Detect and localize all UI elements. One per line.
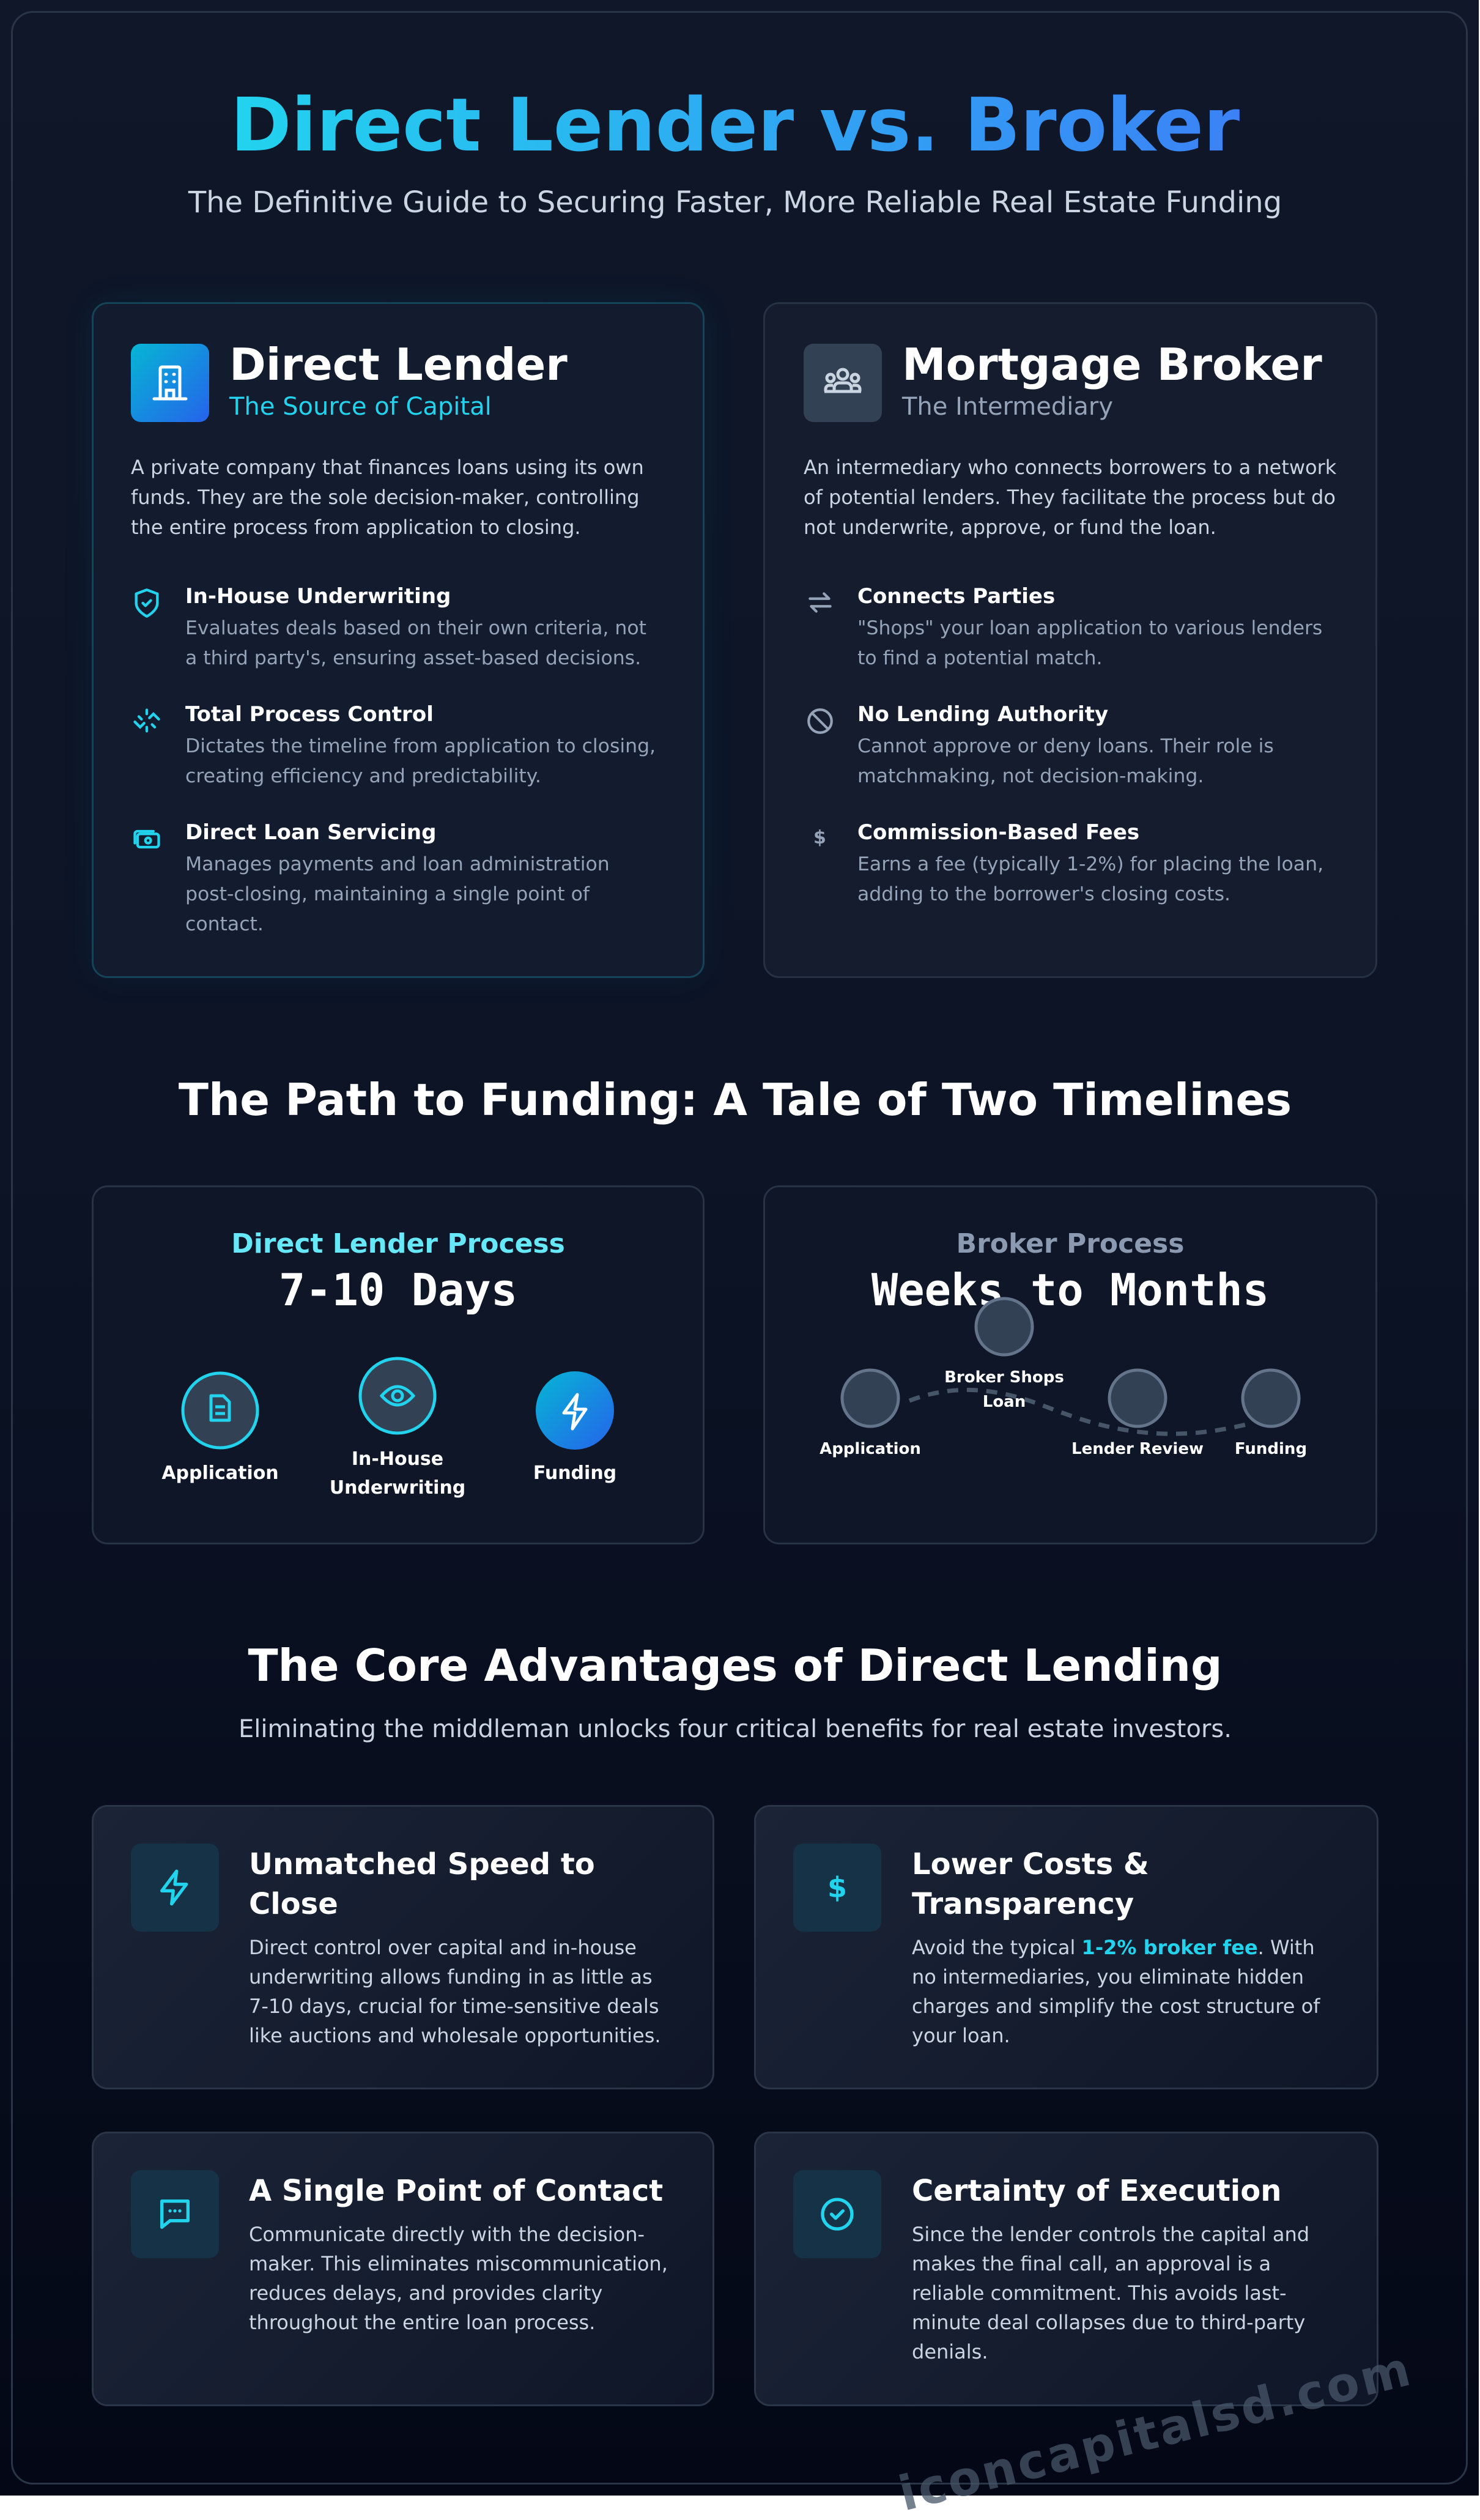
text: direct lender description: [131, 456, 644, 539]
feature: no lending authority: matchmaking, not decision-making.: [857, 765, 1204, 787]
feature: connects parties: to find a potential match.: [857, 647, 1103, 669]
step: application: Application: [820, 1440, 921, 1458]
text: certainty: makes the final call, an approval is a: [912, 2252, 1271, 2275]
feature: no lending authority: No Lending Authority: [857, 702, 1108, 727]
heading: core advantages: The Core Advantages of Direct Lending: [248, 1640, 1223, 1691]
feature: direct loan servicing: Manages payments and loan administration: [185, 853, 610, 875]
panel: lower costs: [754, 1805, 1378, 2089]
step: application: Application: [161, 1462, 279, 1484]
icon: check circle: [793, 2170, 881, 2258]
text: certainty: [912, 2223, 1309, 2363]
feature: direct loan servicing: post-closing, maintaining a single point of: [185, 883, 590, 905]
feature: in-house underwriting: [185, 584, 646, 669]
step: broker shops loan: Loan: [983, 1393, 1026, 1411]
feature: total process control: [185, 702, 656, 787]
feature: connects parties: Connects Parties: [857, 584, 1055, 609]
text: lower costs: Avoid the typical 1-2% broker fee. With: [912, 1936, 1315, 1959]
subheading: source of capital: The Source of Capital: [229, 393, 492, 421]
feature: in-house underwriting: In-House Underwriting: [185, 584, 451, 609]
subheading: intermediary: The Intermediary: [902, 393, 1113, 421]
icon: servicing: [133, 829, 160, 849]
connector: dashed path: [909, 1390, 1251, 1434]
heading: broker process: Broker Process: [956, 1228, 1184, 1259]
feature: commission fees: Earns a fee (typically 1-2%) for placing the loan,: [857, 853, 1323, 875]
text: single point: maker. This eliminates miscommunication,: [249, 2252, 668, 2275]
chart: broker steps: [820, 1297, 1307, 1458]
step: underwriting: In-House: [352, 1448, 443, 1470]
feature: total process control: Dictates the timeline from application to closing,: [185, 735, 656, 757]
title: speed: [249, 1847, 595, 1921]
text: broker description: [804, 456, 1337, 539]
number: 7-10 days: 7-10 Days: [279, 1264, 517, 1316]
panel: mortgage broker: [763, 302, 1377, 978]
text: single point: reduces delays, and provides clarity: [249, 2281, 602, 2305]
icon: shield: [135, 588, 159, 618]
title: Direct Lender vs. Broker: [231, 83, 1240, 168]
icon: dollar: [793, 1844, 881, 1932]
title: lower costs: [912, 1847, 1149, 1921]
text: speed: 7-10 days, crucial for time-sensitive deals: [249, 1995, 659, 2018]
text: certainty: denials.: [912, 2340, 988, 2363]
feature: total process control: Total Process Control: [185, 702, 434, 727]
heading: direct lender: Direct Lender: [229, 339, 568, 390]
icon: chat: [131, 2170, 219, 2258]
icon: lightning: [131, 1844, 219, 1932]
feature: in-house underwriting: a third party's, ensuring asset-based decisions.: [185, 647, 641, 669]
text: lower costs: no intermediaries, you eliminate hidden: [912, 1965, 1304, 1988]
title: lower costs: Transparency: [912, 1887, 1134, 1921]
icon: people: [804, 344, 882, 422]
text: advantages subtitle: Eliminating the middleman unlocks four critical benefits for real estate investors.: [239, 1715, 1232, 1743]
feature: direct loan servicing: contact.: [185, 913, 264, 935]
chart: direct lender steps: [161, 1357, 616, 1499]
subtitle: The Definitive Guide to Securing Faster, More Reliable Real Estate Funding: [188, 185, 1282, 220]
title: speed: Unmatched Speed to: [249, 1847, 595, 1881]
panel: speed: [92, 1805, 714, 2089]
feature: direct loan servicing: Direct Loan Servicing: [185, 820, 436, 845]
feature: no lending authority: Cannot approve or deny loans. Their role is: [857, 735, 1274, 757]
text: broker description: An intermediary who connects borrowers to a network: [804, 456, 1336, 479]
step: funding: Funding: [1235, 1440, 1307, 1458]
heading: mortgage broker: Mortgage Broker: [902, 339, 1322, 390]
title: lower costs: Lower Costs &: [912, 1847, 1149, 1881]
step: funding: Funding: [533, 1462, 616, 1484]
step: broker shops loan: Broker Shops: [944, 1368, 1064, 1387]
icon: building: [131, 344, 209, 422]
text: single point: Communicate directly with the decision-: [249, 2223, 645, 2246]
icon: ban: [807, 708, 833, 734]
heading: direct lender process: Direct Lender Process: [231, 1228, 565, 1259]
step: broker shops loan: [944, 1299, 1064, 1411]
text: broker description: not underwrite, approve, or fund the loan.: [804, 516, 1216, 539]
icon: arrows: [808, 592, 832, 613]
icon: process control: [133, 708, 160, 733]
title: certainty: Certainty of Execution: [912, 2174, 1281, 2208]
step: funding: [1235, 1370, 1307, 1458]
feature: direct loan servicing: [185, 820, 610, 935]
panel: certainty: [754, 2132, 1378, 2406]
feature: commission fees: [857, 820, 1323, 905]
feature: in-house underwriting: Evaluates deals based on their own criteria, not: [185, 617, 646, 639]
step: lender review: Lender Review: [1071, 1440, 1204, 1458]
text: lower costs: your loan.: [912, 2024, 1010, 2047]
feature: commission fees: adding to the borrower's closing costs.: [857, 883, 1230, 905]
text: speed: underwriting allows funding in as little as: [249, 1965, 653, 1988]
text: broker description: of potential lenders. They facilitate the process but do: [804, 486, 1336, 509]
text: certainty: reliable commitment. This avoids last-: [912, 2281, 1287, 2305]
text: direct lender description: the entire process from application to closing.: [131, 516, 581, 539]
feature: connects parties: "Shops" your loan application to various lenders: [857, 617, 1322, 639]
title: single point: A Single Point of Contact: [249, 2174, 663, 2208]
step: lender review: [1071, 1370, 1204, 1458]
feature: connects parties: [857, 584, 1322, 669]
text: direct lender description: A private company that finances loans using its own: [131, 456, 644, 479]
text: certainty: Since the lender controls the capital and: [912, 2223, 1309, 2246]
step: underwriting: Underwriting: [330, 1477, 465, 1499]
feature: commission fees: Commission-Based Fees: [857, 820, 1139, 845]
panel: direct lender: [92, 302, 705, 978]
text: single point: [249, 2223, 668, 2334]
title: speed: Close: [249, 1887, 338, 1921]
icon: dollar: $: [813, 827, 826, 848]
feature: total process control: creating efficiency and predictability.: [185, 765, 541, 787]
text: speed: Direct control over capital and in-house: [249, 1936, 637, 1959]
text: speed: like auctions and wholesale opportunities.: [249, 2024, 661, 2047]
panel: broker timeline: [763, 1185, 1377, 1544]
panel: direct lender timeline: [92, 1185, 705, 1544]
step: underwriting: [330, 1358, 465, 1499]
text: speed: [249, 1936, 661, 2047]
step: funding: [533, 1371, 616, 1484]
heading: timelines: The Path to Funding: A Tale of Two Timelines: [179, 1074, 1292, 1125]
number: weeks to months: Weeks to Months: [871, 1264, 1269, 1316]
text: lower costs: charges and simplify the cost structure of: [912, 1995, 1320, 2018]
panel: single point of contact: [92, 2132, 714, 2406]
icon: dollar: $: [827, 1871, 847, 1904]
text: direct lender description: funds. They are the sole decision-maker, controlling: [131, 486, 640, 509]
watermark: iconcapitalsd.com: [894, 2341, 1418, 2520]
text: lower costs: [912, 1936, 1320, 2047]
step: application: [820, 1370, 921, 1458]
text: single point: throughout the entire loan process.: [249, 2311, 595, 2334]
step: application: [161, 1373, 279, 1484]
text: certainty: minute deal collapses due to third-party: [912, 2311, 1305, 2334]
feature: no lending authority: [857, 702, 1274, 787]
